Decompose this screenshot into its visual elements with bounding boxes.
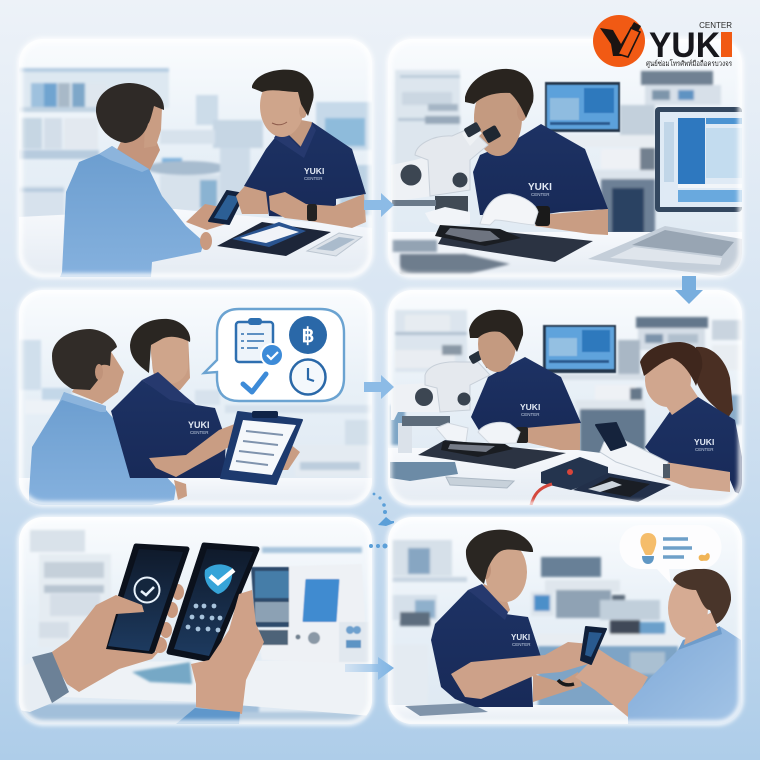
phone in hands	[581, 627, 606, 664]
phone right with shield check	[169, 545, 257, 660]
equipment on lower left of desk	[392, 240, 510, 274]
test equipment	[251, 564, 369, 664]
dotted connector from panel 4 to panel 5	[369, 493, 394, 548]
desk	[390, 232, 740, 271]
customer seen from behind	[60, 83, 204, 277]
microscope	[391, 122, 501, 212]
technician with tablet	[111, 319, 300, 478]
right hand holding phone	[176, 590, 264, 724]
counter	[21, 478, 370, 500]
panel: finished phones	[19, 517, 372, 724]
speech bubble with lightbulb	[620, 525, 722, 584]
clipboard tablet	[221, 411, 302, 484]
phone left with check mark	[104, 546, 187, 655]
technician with ponytail: YUKI	[694, 437, 714, 447]
panel: diagnosis and quote	[19, 290, 372, 505]
technician at microscope: CENTER	[531, 192, 550, 197]
glove on the left	[425, 207, 470, 226]
logo wordmark: YUK	[649, 26, 720, 65]
technician at microscope: YUKI	[528, 182, 552, 193]
wrist and watch	[19, 652, 69, 712]
technician	[431, 530, 590, 707]
speech bubble with icons	[204, 309, 344, 401]
technician at microscope	[465, 69, 608, 235]
technician at bench: YUKI	[520, 402, 540, 412]
icon: orange phone badge	[593, 15, 645, 67]
logo wordmark: ศูนย์ซ่อมโทรศัพท์มือถือครบวงจร	[646, 59, 732, 68]
circuit board on repair mat	[435, 225, 593, 262]
counter	[388, 705, 640, 724]
left hand with thumb	[49, 595, 166, 692]
arrow: panel 1 to panel 2	[364, 193, 394, 217]
monitor	[543, 325, 616, 373]
arrow: panel 3 to panel 4	[364, 375, 394, 399]
logo: YUKI Center	[593, 15, 732, 68]
icon: clock	[290, 360, 326, 394]
icon: lightbulb	[640, 533, 656, 564]
table	[60, 660, 372, 716]
technician: CENTER	[512, 642, 531, 647]
technician in navy polo: YUKI	[304, 166, 324, 176]
technician in navy polo: CENTER	[304, 176, 323, 181]
fingers behind left phone	[153, 584, 184, 653]
customer hands	[186, 204, 226, 250]
keyboard	[588, 226, 742, 276]
panel: consultation at the counter	[19, 39, 372, 277]
device on counter	[405, 703, 488, 716]
arrow: panel 5 to panel 6	[345, 657, 394, 680]
technician at bench	[436, 310, 581, 450]
tablet and phone on table	[217, 222, 362, 256]
wall monitor	[545, 82, 620, 132]
technician with ponytail	[596, 342, 742, 495]
icon: payment badge: ฿	[302, 325, 314, 347]
customer	[575, 569, 742, 724]
panel: microscope inspection	[388, 39, 742, 277]
technician at bench: CENTER	[521, 412, 540, 417]
phone held by customer	[209, 191, 244, 224]
icon: checklist clipboard	[236, 318, 283, 366]
logo wordmark: CENTER	[699, 21, 732, 30]
technician with tablet: CENTER	[190, 430, 209, 435]
blue tray on table	[132, 662, 192, 684]
technician: YUKI	[511, 633, 530, 642]
table	[20, 209, 369, 270]
technician with ponytail: CENTER	[695, 447, 714, 452]
tester device with red cable	[531, 457, 608, 505]
microscope	[391, 350, 499, 453]
arrow: panel 2 to panel 4	[675, 276, 703, 304]
panel: repair and testing	[388, 290, 742, 505]
technician with tablet: YUKI	[188, 420, 210, 430]
icon: small heart	[699, 553, 710, 561]
technician in navy polo	[236, 70, 366, 228]
panel: handing phone back to customer	[388, 517, 742, 724]
icon: check mark	[243, 374, 266, 392]
phones on tray	[573, 473, 671, 502]
bench	[390, 448, 734, 498]
repair mat with board	[418, 440, 566, 469]
customer	[29, 329, 187, 505]
parts trays	[390, 462, 458, 481]
large monitor	[655, 107, 742, 212]
